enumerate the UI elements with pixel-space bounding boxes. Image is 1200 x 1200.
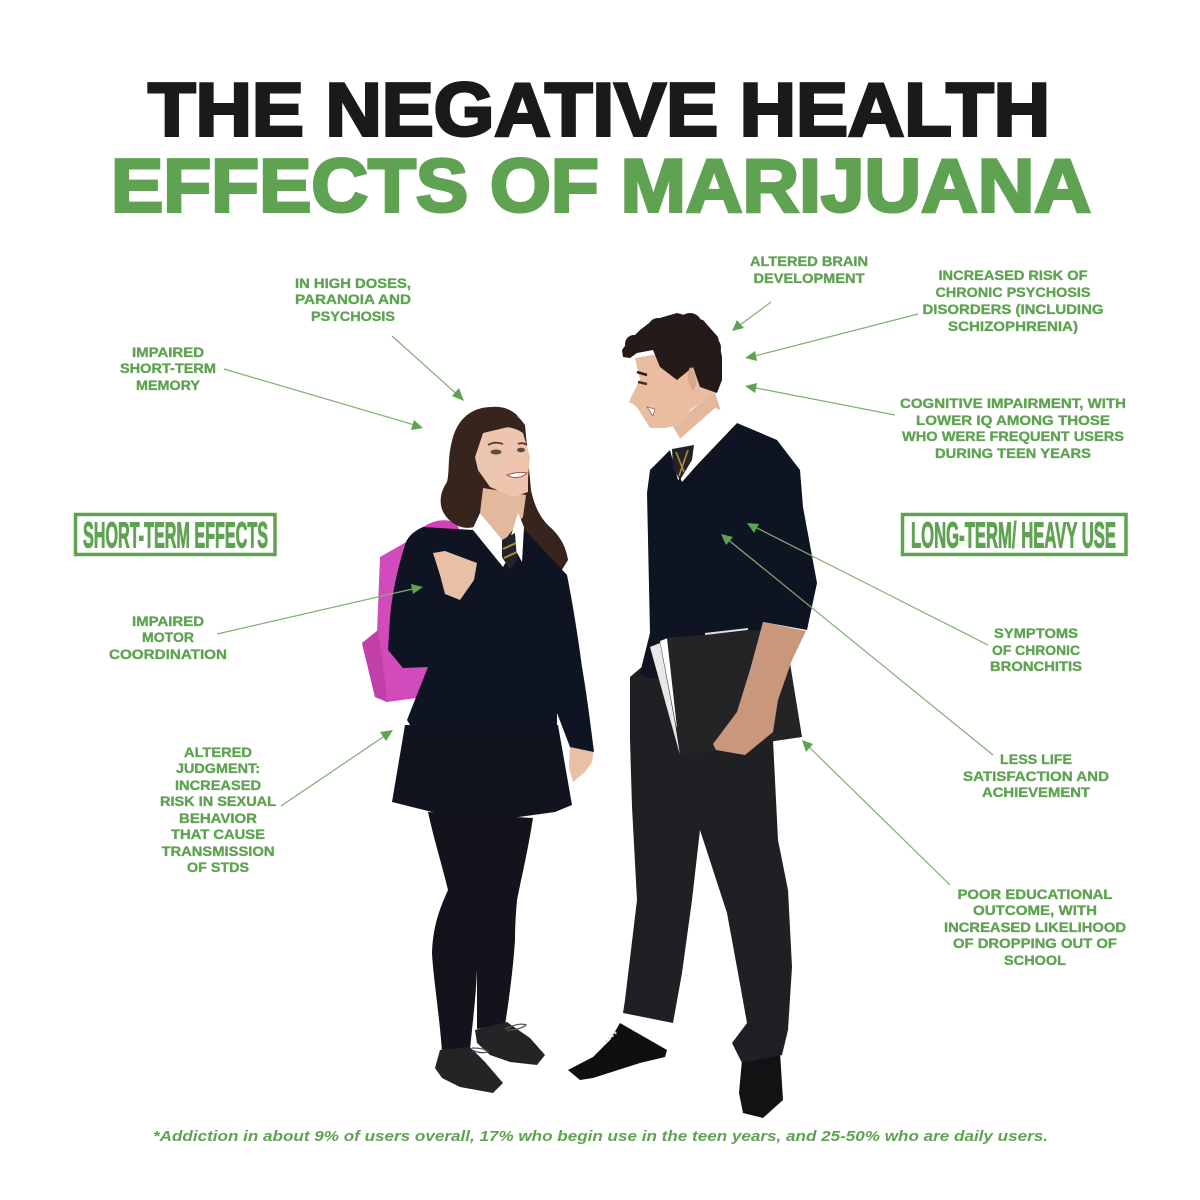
label: short-term memory: MEMORY [136, 378, 200, 393]
label: life satisfaction: LESS LIFE [1000, 752, 1072, 767]
arrow: paranoia [392, 336, 464, 401]
label: chronic psychosis [922, 268, 1104, 334]
label: life satisfaction: ACHIEVEMENT [982, 785, 1091, 800]
label: short-term memory: IMPAIRED [132, 345, 204, 360]
girl shoes [435, 1022, 545, 1093]
label: altered judgment: THAT CAUSE [171, 827, 265, 842]
label: in high doses [295, 276, 411, 324]
backpack [362, 520, 465, 702]
label: chronic psychosis: SCHIZOPHRENIA) [948, 319, 1078, 334]
label: brain development: ALTERED BRAIN [750, 254, 868, 269]
label: in high doses: IN HIGH DOSES, [295, 276, 411, 291]
label: motor coordination: IMPAIRED [132, 614, 204, 629]
boy collar and tie [670, 408, 737, 482]
figure: girl with backpack [362, 407, 594, 1093]
badge: short-term effects [76, 514, 275, 556]
label: life satisfaction [963, 752, 1109, 800]
label: altered judgment: BEHAVIOR [179, 811, 257, 826]
label: chronic psychosis: CHRONIC PSYCHOSIS [936, 285, 1090, 300]
label: cognitive impairment: LOWER IQ AMONG THOSE [916, 413, 1110, 428]
girl right hand [569, 745, 594, 782]
boy left shoe [568, 1023, 667, 1080]
figure: boy with folder [568, 313, 817, 1118]
boy neck [672, 392, 722, 455]
label: brain development: DEVELOPMENT [754, 271, 865, 286]
label: cognitive impairment [900, 396, 1126, 461]
boy folder [650, 629, 802, 755]
boy eye and mouth [637, 367, 696, 416]
label: altered judgment: ALTERED [184, 745, 252, 760]
label: altered judgment: RISK IN SEXUAL [160, 794, 276, 809]
arrow: memory [224, 369, 423, 430]
text: SHORT-TERM EFFECTS [83, 514, 268, 556]
arrow: bronchitis [747, 523, 988, 645]
label: chronic bronchitis: SYMPTOMS [994, 626, 1078, 641]
label: educational outcome: OUTCOME, WITH [973, 903, 1097, 918]
boy trousers [623, 660, 792, 1063]
label: in high doses: PSYCHOSIS [311, 309, 395, 324]
label: motor coordination [109, 614, 227, 662]
arrow: brain [732, 302, 771, 331]
arrow: motor coordination [217, 584, 423, 634]
girl face [460, 407, 530, 497]
girl skirt [392, 725, 572, 820]
arrow: education [802, 740, 950, 885]
boy sweater [640, 423, 817, 680]
girl hand on strap [433, 551, 477, 600]
title: THE NEGATIVE HEALTH [148, 68, 1050, 152]
label: chronic bronchitis: BRONCHITIS [990, 659, 1082, 674]
arrow: psychosis [745, 314, 918, 361]
boy arm and hand [713, 622, 806, 755]
boy left shoe laces [606, 1032, 616, 1042]
boy hair [622, 313, 722, 393]
arrow: cognitive [745, 383, 895, 415]
label: motor coordination: MOTOR [142, 630, 194, 645]
girl neck, collar and tie [473, 488, 526, 570]
footnote: *Addiction in about 9% of users overall, 17% who begin use in the teen years, and 25-50% who are daily users. [153, 1128, 1048, 1145]
label: educational outcome: INCREASED LIKELIHOOD [944, 920, 1126, 935]
boy face [629, 350, 717, 428]
label: altered judgment: OF STDS [187, 860, 249, 875]
girl shoe laces [472, 1024, 526, 1053]
label: chronic bronchitis [990, 626, 1082, 674]
arrow: life satisfaction [721, 534, 993, 755]
label: motor coordination: COORDINATION [109, 647, 227, 662]
label: educational outcome: POOR EDUCATIONAL [958, 887, 1112, 902]
label: altered judgment: INCREASED [175, 778, 261, 793]
label: cognitive impairment: WHO WERE FREQUENT USERS [902, 429, 1124, 444]
label: brain development [750, 254, 868, 286]
label: short-term memory [120, 345, 216, 393]
label: educational outcome: OF DROPPING OUT OF [953, 936, 1117, 951]
label: altered judgment: JUDGMENT: [176, 761, 260, 776]
label: educational outcome [944, 887, 1126, 968]
label: chronic psychosis: INCREASED RISK OF [938, 268, 1088, 283]
label: short-term memory: SHORT-TERM [120, 361, 216, 376]
boy right shoe [739, 1052, 783, 1118]
girl hair back [441, 407, 568, 577]
label: cognitive impairment: DURING TEEN YEARS [935, 446, 1091, 461]
girl legs [428, 812, 533, 1052]
title: EFFECTS OF MARIJUANA [111, 144, 1091, 228]
label: life satisfaction: SATISFACTION AND [963, 769, 1109, 784]
girl sweater [388, 527, 594, 752]
label: chronic bronchitis: OF CHRONIC [992, 643, 1080, 658]
label: chronic psychosis: DISORDERS (INCLUDING [922, 302, 1104, 317]
arrow: judgment [281, 730, 393, 806]
label: altered judgment: TRANSMISSION [162, 844, 274, 859]
title [111, 68, 1091, 228]
label: educational outcome: SCHOOL [1004, 953, 1066, 968]
label: in high doses: PARANOIA AND [295, 292, 411, 307]
label: cognitive impairment: COGNITIVE IMPAIRMENT, WITH [900, 396, 1126, 411]
label: altered judgment [160, 745, 276, 875]
